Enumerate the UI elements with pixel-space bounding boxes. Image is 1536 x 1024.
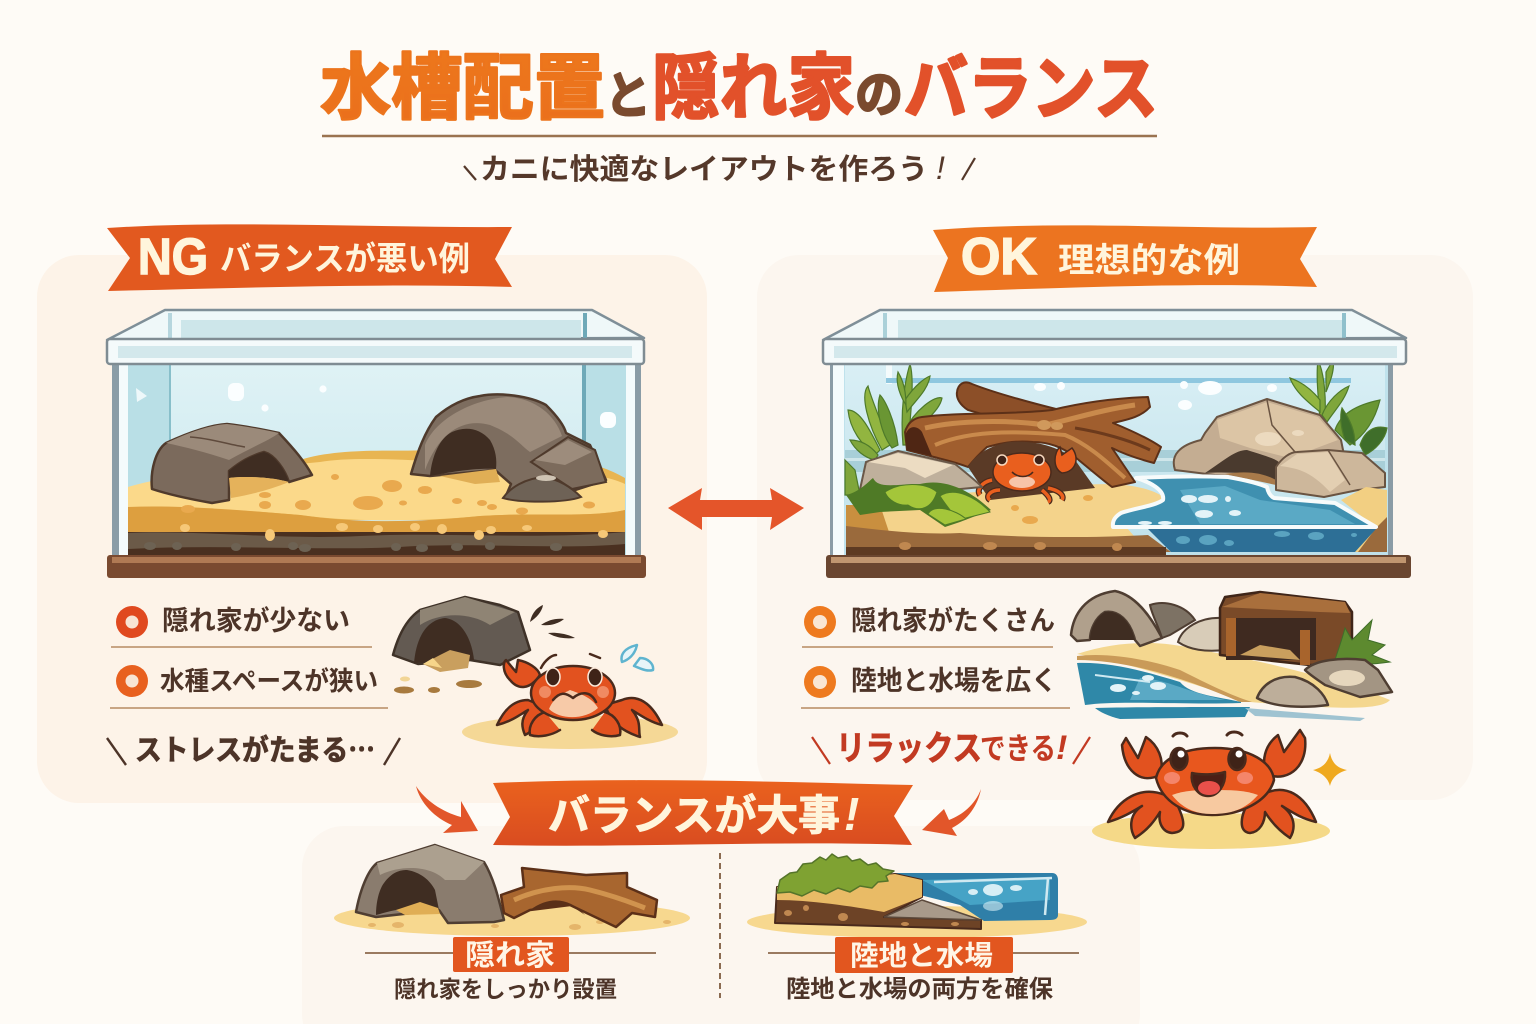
- wooden box: [1220, 592, 1352, 665]
- arrow: left to summary: [416, 786, 478, 833]
- bullet 2: [804, 666, 836, 698]
- right rock group: [1174, 399, 1387, 552]
- mouth: [1192, 772, 1225, 796]
- OK tank: [823, 310, 1411, 578]
- rock hide right: [411, 394, 606, 502]
- bubbles: [136, 383, 616, 428]
- tank rim: [823, 339, 1406, 364]
- relax text: できる: [980, 724, 1056, 768]
- OK banner: 理想的な例: [1058, 233, 1240, 282]
- sand middle band: [128, 507, 625, 538]
- brows: [1173, 732, 1242, 736]
- tank lid back: [823, 310, 1406, 340]
- double arrow: [668, 488, 804, 530]
- land block: [775, 874, 981, 929]
- sand ground: [846, 484, 1165, 552]
- summary banner: [493, 780, 913, 846]
- driftwood main: [905, 397, 1161, 487]
- item 2 text: 水種スペースが狭い: [160, 661, 378, 698]
- panel: summary: [302, 826, 1140, 1024]
- sand back: [128, 448, 625, 520]
- caption: hide: 隠れ家をしっかり設置: [394, 970, 617, 1004]
- rock small: [1257, 677, 1328, 707]
- bullet 2: [116, 665, 148, 697]
- rock right: [1305, 659, 1392, 697]
- title: の: [855, 55, 903, 127]
- stress text: ストレスがたまる…: [135, 727, 375, 769]
- tank glass: [112, 364, 640, 556]
- bullet 1: [804, 606, 836, 638]
- OK crab: [1108, 730, 1316, 838]
- summary banner: !: [844, 788, 859, 840]
- title: と: [605, 56, 651, 128]
- bubbles: [1034, 381, 1277, 410]
- summary banner: バランスが大事: [548, 782, 840, 843]
- arrow: right to summary: [922, 789, 981, 836]
- title: バランス: [904, 33, 1158, 134]
- NG tank: [107, 310, 646, 578]
- NG crab: [497, 654, 662, 737]
- item 1 text: 隠れ家がたくさん: [851, 599, 1055, 638]
- caption: land and water: 陸地と水場の両方を確保: [786, 969, 1053, 1004]
- plant: [1335, 620, 1390, 664]
- tank base: [826, 555, 1411, 578]
- driftwood back branch: [957, 382, 1070, 440]
- round rock: [1178, 618, 1225, 651]
- summary divider: [719, 853, 721, 998]
- tank base: [107, 555, 646, 578]
- body: [1156, 748, 1274, 815]
- panel: NG: [37, 255, 707, 803]
- plants right: [1290, 360, 1387, 455]
- tank rim: [107, 339, 644, 364]
- item 1 text: 隠れ家が少ない: [162, 599, 350, 638]
- claws: [1122, 737, 1162, 778]
- water block: [894, 873, 1058, 921]
- NG list: [110, 599, 388, 708]
- title: 水槽配置: [320, 29, 605, 134]
- OK list: [801, 599, 1070, 708]
- bullet 1: [116, 606, 148, 638]
- NG banner: [107, 224, 512, 291]
- water top: [1113, 476, 1376, 527]
- tank glass: [830, 364, 1392, 556]
- sand: [334, 900, 690, 936]
- rock: [356, 845, 504, 923]
- title: 隠れ家: [652, 29, 855, 134]
- NG banner: NG: [138, 228, 208, 285]
- label: hide: [365, 932, 656, 974]
- tank lid back: [107, 310, 644, 340]
- subtitle: カニに快適なレイアウトを作ろう: [480, 146, 928, 188]
- icon: NG small rock: [393, 597, 530, 694]
- stone arch: [1071, 591, 1162, 646]
- icon: summary land and water: [747, 854, 1087, 938]
- icon: sweat drops: [622, 645, 653, 671]
- icon: stress lines: [530, 605, 575, 638]
- cheeks: [1164, 772, 1180, 784]
- label: land and water: [768, 934, 1079, 974]
- icon: sparkle: [1313, 753, 1347, 786]
- label: land and water: 陸地と水場: [850, 934, 993, 974]
- icon: summary hide and driftwood: [334, 845, 690, 936]
- NG crab sand: [462, 715, 678, 749]
- label: hide: 隠れ家: [465, 932, 555, 974]
- OK crab sand: [1092, 813, 1330, 849]
- sand: [1077, 643, 1390, 708]
- sand top: [128, 459, 625, 520]
- moss: [777, 854, 894, 896]
- relax text: [812, 721, 1090, 770]
- sand grains: [144, 474, 608, 552]
- slate: [884, 900, 981, 920]
- water: [1077, 663, 1241, 705]
- rock hide left: [152, 424, 312, 503]
- soil: [128, 532, 625, 556]
- sand: [747, 906, 1087, 938]
- panel: OK: [757, 255, 1473, 800]
- NG banner: バランスが悪い例: [220, 232, 470, 280]
- legs left: [1108, 792, 1183, 838]
- icon: OK hides illustration: [1071, 591, 1392, 721]
- rock left: [859, 451, 982, 494]
- plants left: [845, 364, 942, 495]
- relax text: !: [1056, 729, 1067, 767]
- small crab: [979, 447, 1076, 502]
- relax text: リラックス: [836, 721, 982, 770]
- driftwood: [501, 868, 657, 927]
- subtitle: !: [936, 150, 945, 186]
- water front: [1148, 529, 1376, 552]
- title: [320, 29, 1158, 134]
- OK banner: OK: [961, 228, 1037, 286]
- item 2 text: 陸地と水場を広く: [851, 659, 1057, 698]
- moss: [846, 478, 991, 527]
- eyes: [1170, 748, 1188, 770]
- OK banner: [933, 225, 1317, 292]
- legs right: [1242, 790, 1316, 838]
- soil: [846, 526, 1171, 555]
